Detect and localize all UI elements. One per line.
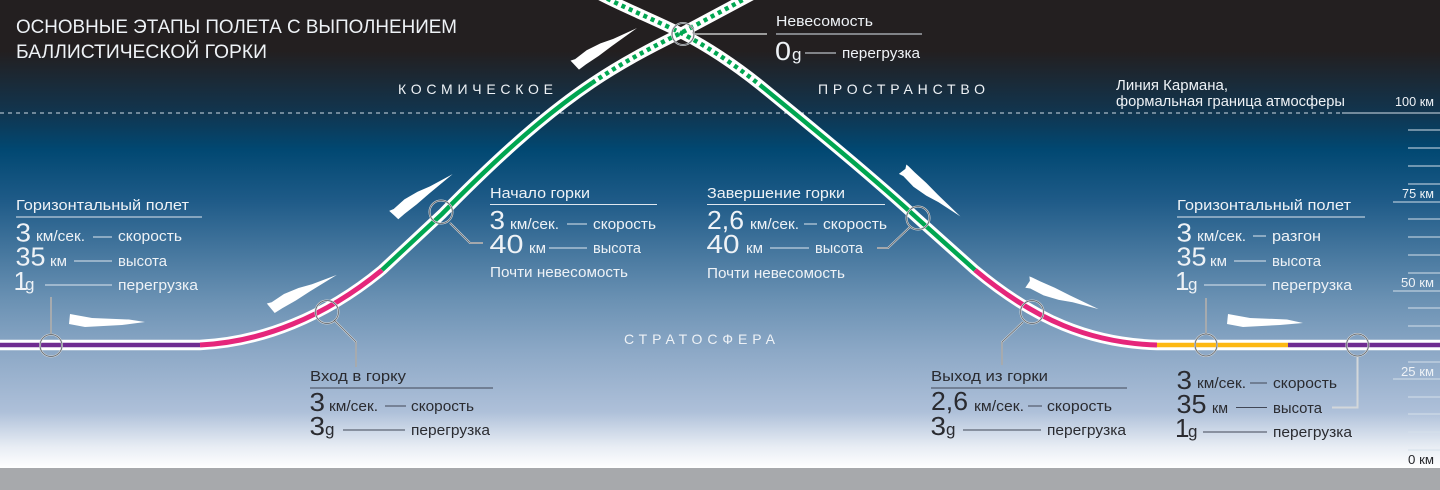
text block: weightlessness [775,13,922,66]
label: космическое пространство [398,81,985,97]
text block: hill start [490,185,657,281]
plane: exiting the hill [1025,276,1101,315]
ground strip [0,468,1440,490]
label: стратосфера: СТРАТОСФЕРА [624,331,776,347]
text block: level flight right lower: км/сек. [1197,376,1246,392]
text block: hill end: высота [815,240,864,257]
marker: weightlessness [672,23,767,45]
text block: horizontal flight right: 35 [1176,242,1206,272]
text block: hill entry: скорость [411,398,474,415]
altitude scale: 0 км [1408,453,1434,467]
text block: horizontal flight left: перегрузка [118,277,199,294]
text block: hill start: высота [593,240,642,257]
altitude scale: 25 км [1401,365,1434,379]
marker: hill end [877,206,930,248]
text block: weightlessness: g [792,45,801,64]
text block: horizontal flight right [1175,197,1365,296]
plane: entering the hill [266,270,340,314]
text block: hill entry: 3 [310,411,325,441]
altitude scale: 50 км [1401,276,1434,290]
text block: hill start: скорость [593,216,656,233]
text block: horizontal flight right: км/сек. [1197,229,1246,245]
text block: horizontal flight right: Горизонтальный полет [1177,197,1351,214]
text block: horizontal flight right: км [1210,254,1227,270]
text block: hill exit: g [946,420,955,439]
text block: hill end: скорость [823,216,887,233]
text block: horizontal flight left: 35 [16,242,46,272]
text block: hill entry [310,368,493,441]
label: космическое пространство: КОСМИЧЕСКОЕ [398,81,553,97]
text block: horizontal flight left: Горизонтальный полет [16,197,189,214]
plane: start of hill [389,169,457,221]
trajectory [0,0,1440,345]
altitude scale: 100 км [1395,95,1434,109]
text block: hill end: 40 [706,229,740,259]
text block: hill end: 2,6 [707,205,744,235]
text block: horizontal flight left: км [50,254,67,270]
text block: weightlessness: 0 [775,36,791,66]
text block: hill entry: g [325,420,334,439]
text block: level flight right lower: 3 [1176,365,1192,395]
text block: hill start: км/сек. [510,217,559,233]
text block: horizontal flight right: 3 [1176,218,1192,248]
text block: weightlessness: перегрузка [842,45,921,62]
text block: hill end: Завершение горки [707,185,845,202]
marker: hill exit [1002,300,1044,365]
altitude scale [1342,95,1440,467]
text block: level flight right lower: км [1212,401,1228,417]
text block: horizontal flight left: 1 [14,266,28,296]
text block: hill exit: Выход из горки [931,368,1048,385]
text block: hill exit: перегрузка [1047,422,1127,439]
text block: horizontal flight left [14,197,202,296]
text block: horizontal flight right: 1 [1175,266,1189,296]
marker: hill entry [316,300,356,367]
plane: level flight right [1227,314,1303,327]
text block: hill start: км [529,241,546,257]
Karman dashed line [0,112,1342,114]
text block: level flight right lower: перегрузка [1273,424,1353,441]
title: ОСНОВНЫЕ ЭТАПЫ ПОЛЕТА С ВЫПОЛНЕНИЕМ [16,17,457,38]
text block: horizontal flight right: разгон [1272,228,1321,245]
title [16,17,457,63]
text block: hill end: Почти невесомость [707,265,845,282]
text block: hill end: км/сек. [750,217,799,233]
plane: level flight left [69,314,145,327]
label: Karman line: Линия Кармана, [1116,77,1228,94]
text block: hill start: 3 [490,205,505,235]
text block: hill end: км [746,241,763,257]
marker: hill start [430,200,483,243]
text block: horizontal flight right: высота [1272,253,1322,270]
text block: horizontal flight right: g [1188,275,1197,294]
text block: level flight right lower: скорость [1273,375,1337,392]
text block: hill start: Почти невесомость [490,264,628,281]
title: БАЛЛИСТИЧЕСКОЙ ГОРКИ [16,41,267,63]
plane: weightlessness [570,23,641,71]
text block: weightlessness: Невесомость [776,13,873,30]
marker: level flight right [1332,334,1368,408]
text block: hill start: 40 [490,229,524,259]
text block: hill end [706,185,887,282]
altitude scale: 75 км [1402,187,1434,201]
marker: acceleration [1195,298,1217,356]
label: космическое пространство: ПРОСТРАНСТВО [818,81,985,97]
text block: hill entry: км/сек. [329,399,378,415]
text block: hill entry: 3 [310,387,325,417]
text block: level flight right lower: g [1188,422,1197,441]
text block: horizontal flight left: высота [118,253,168,270]
text block: hill start: Начало горки [490,185,590,202]
text block: level flight right lower [1175,365,1353,443]
label: Karman line [1116,77,1345,110]
text block: hill exit [930,368,1127,441]
text block: level flight right lower: высота [1273,400,1323,417]
text block: hill exit: скорость [1047,398,1112,415]
text block: horizontal flight left: км/сек. [36,229,85,245]
text block: hill exit: 3 [930,411,946,441]
text block: horizontal flight left: 3 [16,218,31,248]
text block: hill entry: перегрузка [411,422,491,439]
text block: horizontal flight right: перегрузка [1272,277,1353,294]
text block: horizontal flight left: g [25,275,34,294]
label: Karman line: формальная граница атмосферы [1116,93,1345,110]
text block: horizontal flight left: скорость [118,228,182,245]
text block: level flight right lower: 35 [1176,389,1206,419]
text block: hill exit: 2,6 [931,386,968,416]
marker: horizontal flight left [40,297,62,356]
text block: hill entry: Вход в горку [310,368,407,385]
text block: hill exit: км/сек. [974,399,1024,415]
plane: end of hill [898,165,965,221]
text block: level flight right lower: 1 [1175,413,1189,443]
